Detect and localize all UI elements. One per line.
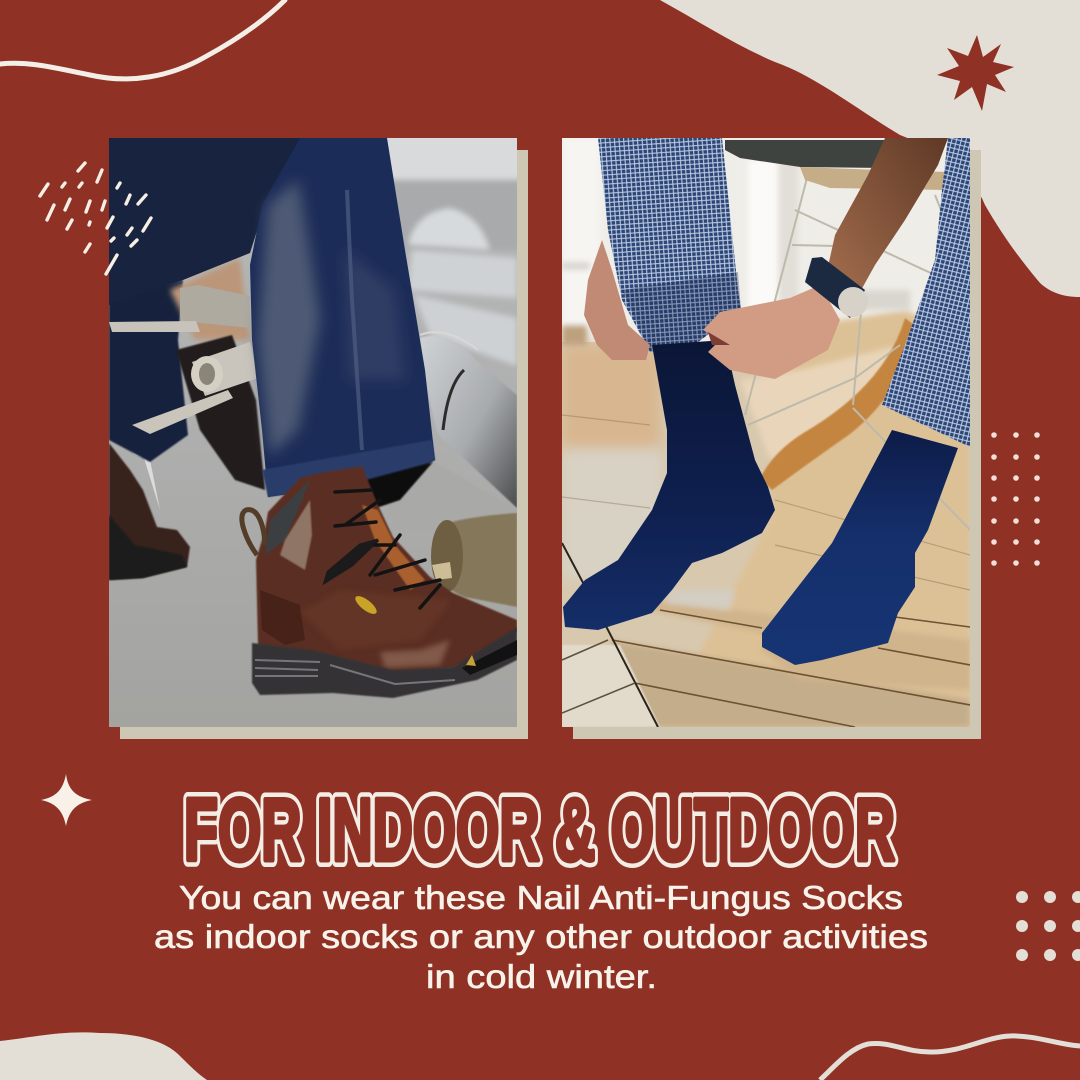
jeans hem (262, 440, 435, 497)
front dark jeans (109, 138, 305, 305)
right sock (762, 430, 958, 665)
body text: as indoor socks or any other outdoor activities (154, 918, 928, 955)
left trouser leg (598, 138, 741, 352)
body text: in cold winter. (426, 958, 657, 995)
glove and far boot (176, 335, 265, 490)
arm (829, 138, 948, 288)
boot pull loop (242, 510, 265, 555)
wrist watch (805, 257, 865, 318)
photo: work boot and jeans (109, 130, 525, 727)
right hand (703, 285, 840, 379)
stump (452, 512, 517, 608)
boot logo (355, 596, 377, 614)
photo frame shadow: left (120, 150, 528, 739)
photo frame shadow: right (573, 150, 981, 739)
wall details (562, 138, 910, 345)
dot grid: right (991, 432, 1040, 566)
background wall (387, 138, 517, 182)
boot laces (335, 490, 440, 608)
right trouser leg (882, 138, 970, 447)
body text: You can wear these Nail Anti-Fungus Socks (179, 879, 903, 916)
concrete behind boot (380, 462, 517, 530)
background blob: top right (660, 0, 1080, 297)
black lace guard (325, 540, 378, 582)
boot collar panel (265, 480, 310, 555)
icon: sparkle (41, 774, 92, 826)
body text (154, 879, 928, 995)
main jeans leg (250, 138, 435, 497)
left hand (584, 240, 650, 360)
chair legs (745, 178, 970, 530)
orange tongue (362, 505, 425, 590)
dot grid: bottom right (1016, 891, 1080, 961)
back boot (109, 443, 190, 580)
boot (256, 466, 517, 672)
dashed pattern (40, 163, 151, 274)
background blob: bottom left (0, 1032, 207, 1080)
floor (562, 342, 768, 727)
skin and rear pipes (170, 258, 250, 340)
pipes (408, 208, 517, 366)
boot sole (252, 627, 517, 698)
wavy line: bottom right (820, 1036, 1080, 1080)
icon: starburst (937, 35, 1014, 111)
pale area under chair (740, 345, 900, 460)
photo: navy dress socks (562, 138, 970, 727)
floor rocker (760, 318, 918, 490)
floor planks (562, 415, 970, 727)
dark rear leg (109, 280, 188, 462)
left sock (563, 340, 775, 630)
rear boot laces background (132, 452, 160, 509)
chair seat (725, 140, 885, 168)
wavy line: top left (0, 0, 285, 79)
